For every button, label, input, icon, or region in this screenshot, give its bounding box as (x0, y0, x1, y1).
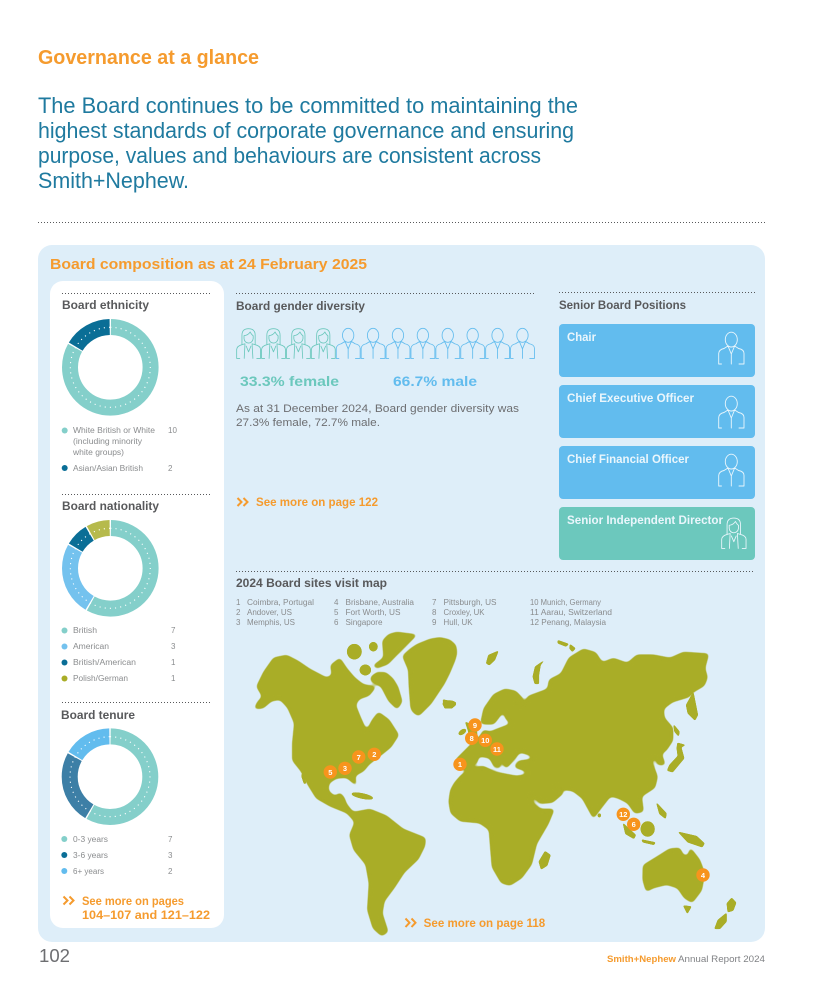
legend: board nationality (62, 626, 176, 683)
list: sites visited: Hull, UK (444, 618, 473, 627)
section: board gender diversity (236, 294, 535, 509)
intro statement: purpose, values and behaviours are consistent across (38, 143, 541, 168)
list: sites visited: Brisbane, Australia (346, 598, 415, 607)
list: sites visited: 3 (236, 618, 241, 627)
world map (253, 632, 736, 937)
legend: board tenure: 2 (168, 867, 173, 876)
footer: report name: Smith+Nephew (607, 954, 677, 965)
list: sites visited: 12 Penang, Malaysia (530, 618, 607, 627)
list: sites visited: 1 (236, 598, 241, 607)
map pins: 2 (372, 750, 376, 759)
list: sites visited: Coimbra, Portugal (247, 598, 314, 607)
footer: report name: Annual Report 2024 (678, 954, 765, 965)
map pins: 6 (632, 820, 636, 829)
page number: 102 (39, 946, 70, 966)
legend: board tenure: 6+ years (73, 867, 104, 876)
map pins: 3 (343, 764, 347, 773)
note: gender diversity at year end: 27.3% female, 72.7% male. (236, 417, 380, 429)
legend: board nationality: 7 (171, 626, 176, 635)
list: sites visited: 9 (432, 618, 437, 627)
stat: male share: 66.7% male (393, 373, 477, 389)
legend: board nationality: 3 (171, 642, 176, 651)
map pins: 4 (701, 871, 706, 880)
heading: map: 2024 Board sites visit map (236, 576, 387, 590)
list: sites visited: Fort Worth, US (346, 608, 400, 617)
list: sites visited: Andover, US (247, 608, 292, 617)
legend: board nationality: Polish/German (73, 674, 128, 683)
heading: board tenure: Board tenure (61, 708, 135, 722)
page title: Governance at a glance (38, 47, 259, 69)
list: sites visited: 2 (236, 608, 241, 617)
link: see more on page 118: See more on page 118 (424, 918, 546, 930)
legend: board tenure: 0-3 years (73, 835, 108, 844)
heading: board ethnicity: Board ethnicity (62, 298, 149, 312)
map pins: 11 (493, 745, 501, 754)
heading: board nationality: Board nationality (62, 499, 159, 513)
arrow: see more chevrons (64, 896, 74, 904)
panel heading: Board composition as at 24 February 2025 (50, 256, 367, 273)
legend: board tenure: 3 (168, 851, 173, 860)
list: sites visited: 6 (334, 618, 339, 627)
note: gender diversity at year end: As at 31 December 2024, Board gender diversity was (236, 403, 520, 415)
list: sites visited: 5 (334, 608, 339, 617)
link: see more on pages: See more on pages (82, 896, 184, 908)
list: sites visited: 7 (432, 598, 437, 607)
legend: board ethnicity: 10 (168, 426, 177, 435)
list: sites visited: 10 Munich, Germany (530, 598, 601, 607)
card: senior independent director: Senior Independent Director (567, 515, 724, 527)
legend: board ethnicity (62, 426, 177, 473)
legend: board ethnicity: (including minority (73, 437, 142, 446)
icons: eight male board members (336, 328, 534, 358)
legend: board ethnicity: White British or White (73, 426, 156, 435)
heading: gender diversity: Board gender diversity (236, 299, 365, 313)
legend: board nationality: American (73, 642, 109, 651)
link: see more on page 122: See more on page 122 (256, 497, 378, 509)
map pins: 12 (619, 810, 627, 819)
section: board sites visit map (236, 572, 755, 937)
legend: board tenure: 7 (168, 835, 173, 844)
legend: board ethnicity: 2 (168, 464, 173, 473)
stat: female share: 33.3% female (240, 373, 339, 389)
card: chief financial officer (559, 446, 755, 499)
legend: board nationality: 1 (171, 674, 176, 683)
list: sites visited: Memphis, US (247, 618, 295, 627)
legend: board tenure (61, 835, 173, 876)
list: sites visited: Croxley, UK (444, 608, 485, 617)
list: sites visited: 11 Aarau, Switzerland (530, 608, 612, 617)
intro statement: highest standards of corporate governance and ensuring (38, 118, 574, 143)
map pins: 10 (481, 736, 489, 745)
donut: board tenure (70, 736, 150, 817)
map pins: 9 (473, 721, 477, 730)
panel: ethnicity, nationality and tenure (50, 281, 224, 928)
section: senior board positions (559, 292, 756, 560)
arrow: see more chevrons (238, 498, 248, 506)
list: sites visited: 4 (334, 598, 339, 607)
list: sites visited: Singapore (346, 618, 383, 627)
card: senior independent director (559, 507, 755, 560)
list: sites visited (236, 598, 612, 627)
panel: board composition (38, 245, 765, 942)
card: chief executive officer: Chief Executive Officer (567, 393, 695, 405)
map pins: 8 (470, 734, 474, 743)
map pins (324, 718, 710, 882)
legend: board nationality: British/American (73, 658, 136, 667)
intro statement (38, 93, 578, 193)
intro statement: Smith+Nephew. (38, 168, 189, 193)
donut: board nationality (70, 528, 151, 609)
footer: report name (607, 954, 765, 965)
list: sites visited: 8 (432, 608, 437, 617)
link: see more on pages: 104–107 and 121–122 (82, 910, 210, 922)
legend: board ethnicity: Asian/Asian British (73, 464, 143, 473)
icons: four female board members (237, 329, 335, 358)
heading: senior board positions: Senior Board Positions (559, 298, 686, 312)
map pins: 5 (328, 768, 332, 777)
card: chair: Chair (567, 332, 597, 344)
card: chair (559, 324, 755, 377)
card: chief financial officer: Chief Financial Officer (567, 454, 690, 466)
map pins: 1 (458, 760, 462, 769)
donut: board ethnicity (70, 327, 151, 408)
legend: board nationality: British (73, 626, 97, 635)
map pins: 7 (357, 753, 361, 762)
legend: board ethnicity: white groups) (72, 448, 124, 457)
link: see more on pages (82, 896, 210, 922)
arrow: see more chevrons (406, 918, 416, 927)
card: chief executive officer (559, 385, 755, 438)
list: sites visited: Pittsburgh, US (444, 598, 496, 607)
intro statement: The Board continues to be committed to maintaining the (38, 93, 578, 118)
legend: board tenure: 3-6 years (73, 851, 108, 860)
note: gender diversity at year end (236, 403, 520, 429)
legend: board nationality: 1 (171, 658, 176, 667)
